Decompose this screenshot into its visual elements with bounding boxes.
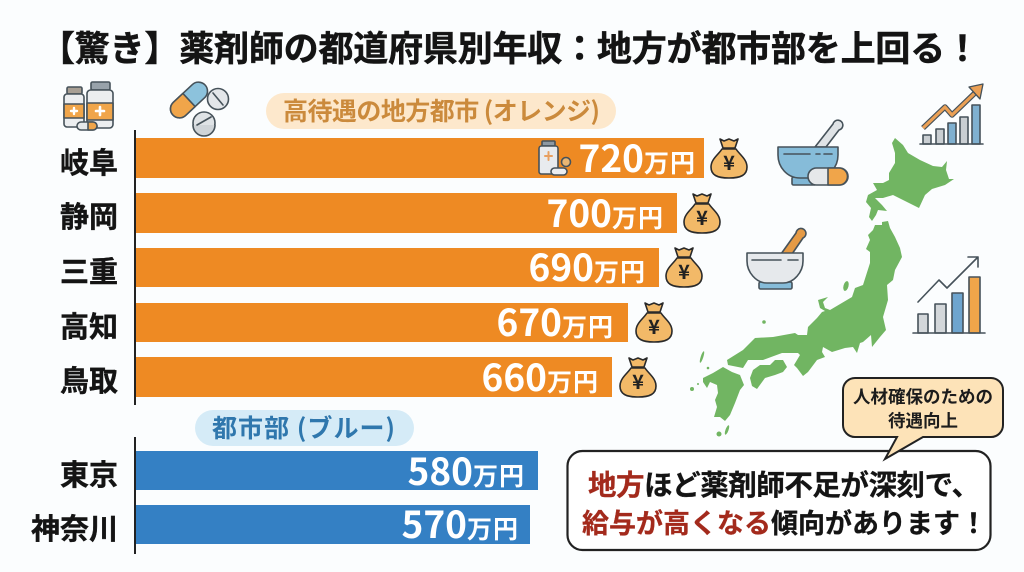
icon: capsule and tablets xyxy=(167,78,228,136)
legend pill: regional cities: 高待遇の地方都市 (オレンジ) xyxy=(283,92,600,128)
callout bubble: 人材確保のための xyxy=(853,384,993,409)
Shikoku xyxy=(750,360,787,389)
icon: money bag Shizuoka: ¥ xyxy=(696,202,708,231)
bar row: Tokyo: 580万円 xyxy=(407,442,525,496)
icon: rising chart with orange arrow xyxy=(920,84,983,144)
bar row: Tottori: 660万円 xyxy=(481,348,599,402)
icon: white mortar xyxy=(747,228,806,289)
icon: rising chart with thin arrow xyxy=(913,257,985,333)
bar row: Gifu: 720万円 xyxy=(578,129,696,183)
bar row: Tokyo: 東京 xyxy=(60,452,118,494)
bar row: Mie: 三重 xyxy=(60,249,118,291)
bar row: Gifu: 岐阜 xyxy=(60,140,118,182)
bar row: Kanagawa: 570万円 xyxy=(401,495,519,549)
legend pill: urban: 都市部 (ブルー) xyxy=(212,409,395,445)
icon: money bag Tottori: ¥ xyxy=(632,366,644,395)
bar row: Shizuoka xyxy=(60,184,677,238)
conclusion box xyxy=(568,451,990,550)
callout bubble: 待遇向上 xyxy=(888,408,958,433)
icon: bottle inside Gifu bar xyxy=(539,141,570,175)
bar row: Tottori: 鳥取 xyxy=(60,358,118,400)
icon: money bag Mie xyxy=(666,248,702,287)
bar row: Mie: 690万円 xyxy=(528,238,646,292)
bar row: Kochi: 高知 xyxy=(60,304,118,346)
icon: medicine bottles xyxy=(64,82,113,130)
bar row: Shizuoka: 700万円 xyxy=(546,184,664,238)
map of Japan xyxy=(690,138,954,436)
axis: urban group xyxy=(134,437,136,554)
bar row: Shizuoka: 静岡 xyxy=(60,194,118,236)
bar row: Tokyo xyxy=(60,442,538,496)
icon: money bag Kochi: ¥ xyxy=(648,311,660,340)
icon: money bag Gifu xyxy=(711,139,747,178)
bar row: Kochi xyxy=(60,293,628,347)
bar row: Gifu xyxy=(60,129,704,183)
bar row: Tottori xyxy=(60,348,612,402)
icon: money bag Shizuoka xyxy=(684,194,720,233)
bar row: Kanagawa xyxy=(31,495,530,549)
Hokkaido xyxy=(866,138,954,221)
bar row: Kochi: 670万円 xyxy=(496,293,614,347)
icon: money bag Gifu: ¥ xyxy=(723,147,735,176)
Kyushu xyxy=(703,367,744,421)
bar row: Mie xyxy=(60,238,659,292)
conclusion box: 給与が高くなる傾向があります！ xyxy=(582,502,987,541)
title: 【驚き】薬剤師の都道府県別年収：地方が都市部を上回る！ xyxy=(40,21,980,72)
icon: money bag Tottori xyxy=(620,358,656,397)
callout bubble xyxy=(843,378,1003,459)
icon: blue mortar with capsule xyxy=(778,120,848,185)
conclusion box: 地方ほど薬剤師不足が深刻で、 xyxy=(588,463,980,504)
axis: regional group xyxy=(134,130,136,405)
bar row: Kanagawa: 神奈川 xyxy=(31,506,118,548)
icon: money bag Kochi xyxy=(636,303,672,342)
islands xyxy=(842,281,850,291)
Honshu xyxy=(727,221,902,376)
icon: money bag Mie: ¥ xyxy=(678,256,690,285)
